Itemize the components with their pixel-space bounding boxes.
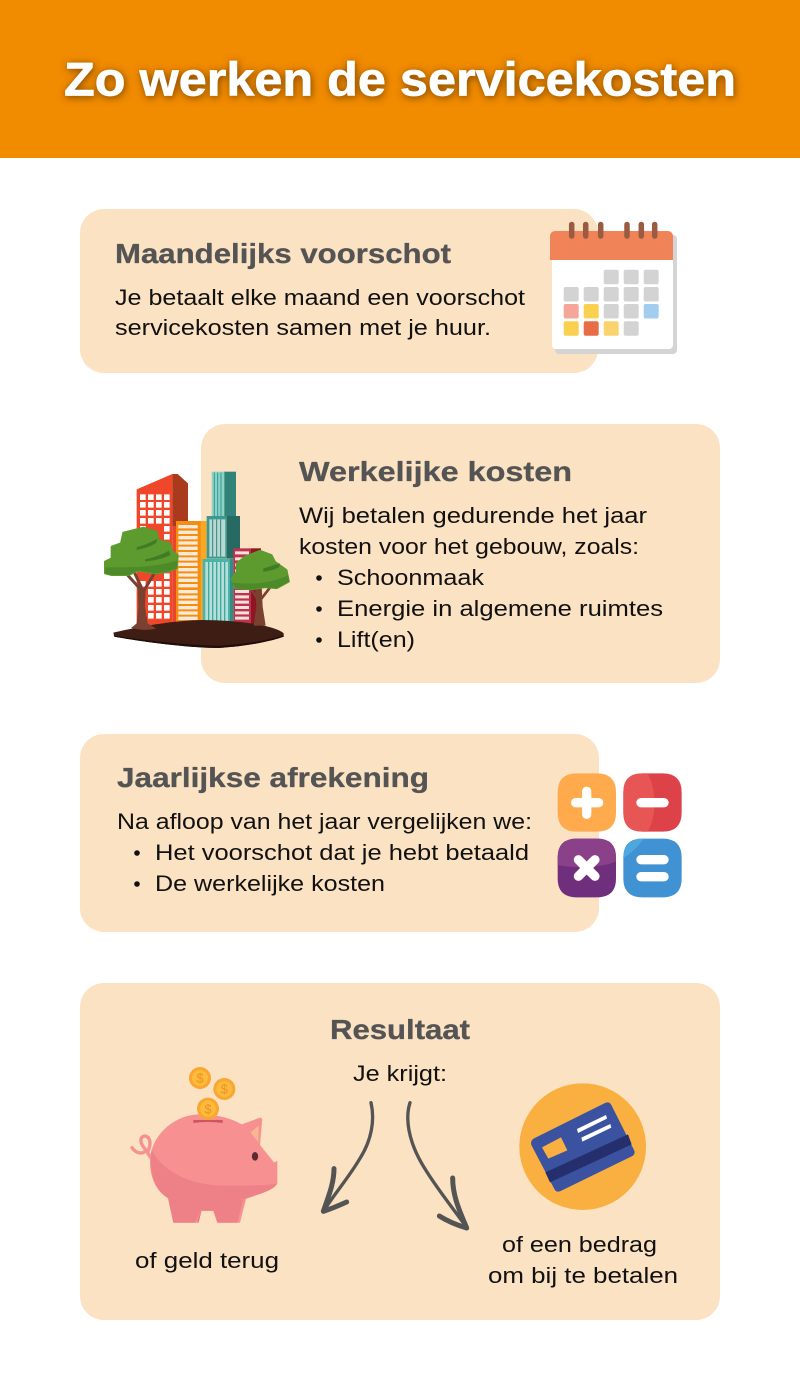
tree right: [232, 551, 289, 626]
text block: kosten intro: [299, 503, 648, 559]
tree left: [105, 528, 178, 630]
icon: credit card: [519, 1083, 646, 1210]
text: of een bedrag om bij te betalen: [488, 1232, 678, 1288]
panel: werkelijke kosten: [105, 424, 720, 683]
text block: voorschot uitleg: servicekosten samen met je huur.: [115, 315, 491, 340]
bullet list: vergelijking: De werkelijke kosten: [155, 871, 385, 896]
text block: kosten intro: Wij betalen gedurende het jaar: [299, 503, 648, 528]
text block: voorschot uitleg: [115, 285, 526, 340]
text block: voorschot uitleg: Je betaalt elke maand een voorschot: [115, 285, 526, 310]
bullet list: vergelijking: Het voorschot dat je hebt betaald: [155, 840, 529, 865]
icon: calculator symbols: [558, 773, 682, 897]
title: Zo werken de servicekosten: [64, 52, 736, 106]
coin dollar sign: $: [196, 1072, 204, 1086]
header banner: Zo werken de servicekosten: [65, 54, 737, 107]
panel: jaarlijkse afrekening: [80, 734, 682, 932]
coin dollar sign: $: [221, 1083, 228, 1097]
arrow: left down: [323, 1103, 373, 1211]
text block: kosten intro: kosten voor het gebouw, zoals:: [299, 534, 639, 559]
header banner: [0, 0, 800, 158]
heading: jaarlijkse afrekening: Jaarlijkse afrekening: [117, 762, 429, 793]
icon: piggy bank with coins: [132, 1067, 277, 1223]
coin dollar sign: $: [204, 1102, 212, 1116]
icon: calendar: [550, 224, 677, 354]
bullet list: kostenposten: Energie in algemene ruimtes: [337, 596, 663, 621]
text block: afrekening intro: Na afloop van het jaar vergelijken we:: [117, 809, 532, 834]
bullet list: kostenposten: Lift(en): [337, 627, 415, 652]
text: je krijgt: Je krijgt:: [353, 1061, 447, 1086]
panel: resultaat: [80, 983, 720, 1320]
text: of geld terug: of geld terug: [135, 1248, 279, 1273]
bullet list: kostenposten: Schoonmaak: [337, 565, 485, 590]
heading: maandelijks voorschot: Maandelijks voorschot: [115, 238, 451, 269]
bullet list: vergelijking: [134, 840, 529, 896]
bullet list: kostenposten: [316, 565, 663, 652]
panel: maandelijks voorschot: [80, 209, 677, 373]
heading: werkelijke kosten: Werkelijke kosten: [299, 456, 572, 487]
icon: city buildings with trees: [105, 472, 289, 648]
text: of een bedrag om bij te betalen: om bij te betalen: [488, 1263, 678, 1288]
arrow: right down: [408, 1103, 467, 1228]
text: of een bedrag om bij te betalen: of een bedrag: [502, 1232, 657, 1257]
heading: resultaat: Resultaat: [330, 1014, 470, 1045]
